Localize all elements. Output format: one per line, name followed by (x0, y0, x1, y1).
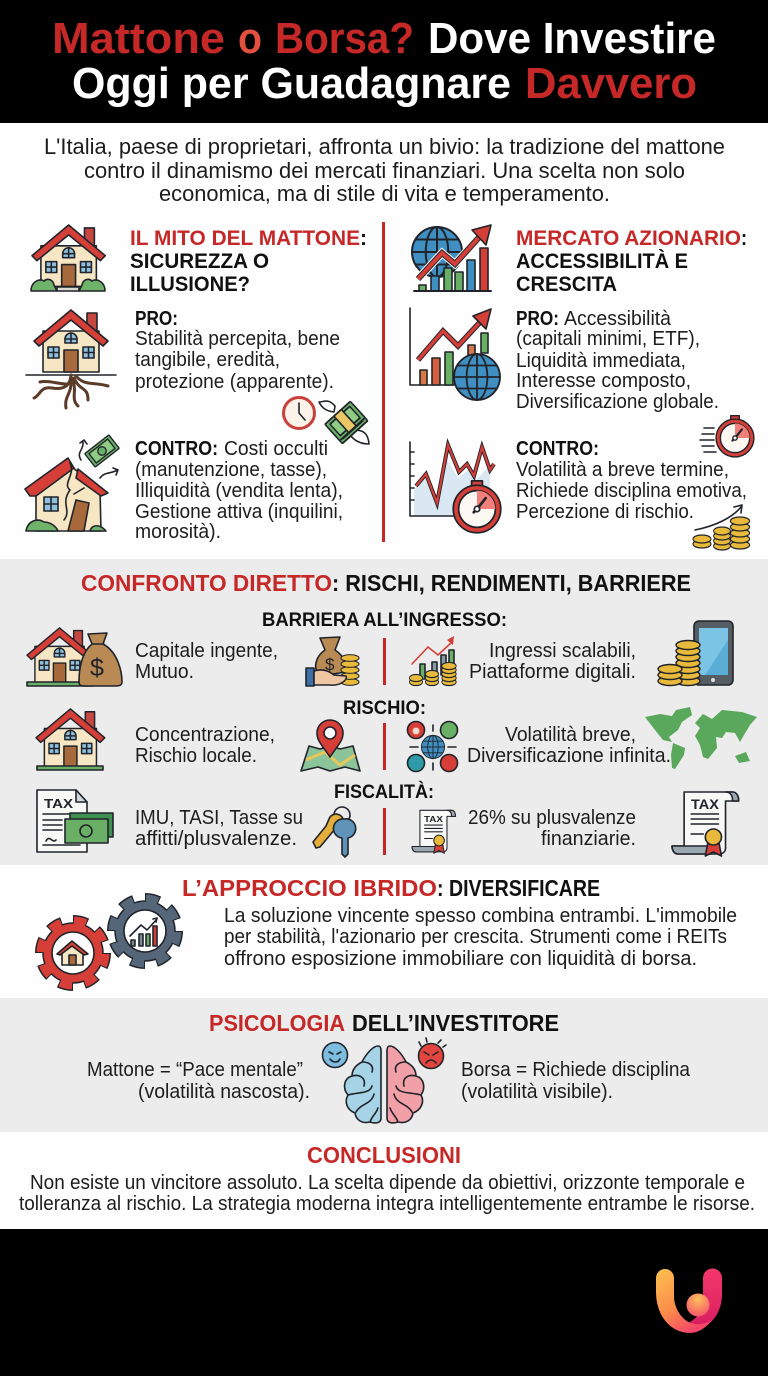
heading: confronto diretto: CONFRONTO DIRETTO (81, 570, 332, 596)
icon: large tax scroll (672, 792, 739, 856)
text: borsa disciplina: (volatilità visibile). (461, 1081, 613, 1103)
text: conclusioni (19, 1172, 755, 1215)
icon: chart and coins (409, 636, 456, 686)
panel: psicologia (0, 998, 768, 1132)
icon: tax document with money: TAX (44, 796, 73, 811)
heading: confronto diretto (81, 570, 691, 596)
text: contro borsa: Richiede disciplina emotiva, (516, 480, 747, 502)
text: imu tasi: IMU, TASI, Tasse su (135, 807, 303, 829)
heading: mercato azionario: ACCESSIBILITÀ E (516, 250, 688, 273)
text: approccio ibrido: offrono esposizione immobiliare con liquidità di borsa. (224, 948, 697, 970)
subheading: rischio: RISCHIO: (343, 698, 426, 719)
panel: conclusioni (0, 1132, 768, 1229)
text: pro borsa: (capitali minimi, ETF), (516, 328, 700, 350)
text: contro borsa: Percezione di rischio. (516, 501, 694, 523)
text: volatilita breve: Diversificazione infinita. (467, 745, 671, 767)
text: pro mattone: Stabilità percepita, bene (135, 328, 340, 350)
text: imu tasi (135, 807, 303, 850)
text: contro mattone: CONTRO: (135, 438, 218, 460)
text: volatilita breve (467, 724, 671, 767)
panel: header (0, 0, 768, 123)
text: ingressi scalabili: Ingressi scalabili, (489, 640, 636, 662)
title: Davvero (525, 59, 697, 108)
heading: psicologia: PSICOLOGIA (209, 1010, 345, 1036)
text: pro mattone: tangibile, eredità, (135, 349, 280, 371)
text: concentrazione: Concentrazione, (135, 724, 275, 746)
icon: stopwatch with speed lines (700, 416, 754, 457)
text: pro borsa: PRO: (516, 308, 559, 330)
heading: il mito del mattone: ILLUSIONE? (130, 273, 250, 296)
heading: mercato azionario (516, 227, 747, 296)
text: contro borsa: Volatilità a breve termine, (516, 459, 729, 481)
text: pro borsa: Interesse composto, (516, 370, 691, 392)
icon: tax document with money (37, 790, 113, 852)
row: barriera all'ingresso (27, 610, 733, 686)
text: contro mattone (135, 438, 343, 543)
icon: calm face (322, 1042, 348, 1068)
icon: phone and coins (658, 621, 733, 686)
heading: approccio ibrido (182, 875, 600, 901)
panel: footer (0, 1229, 768, 1376)
text: contro mattone: (manutenzione, tasse), (135, 459, 327, 481)
text: ingressi scalabili (469, 640, 636, 683)
heading: mercato azionario: : (741, 227, 747, 250)
intro text: L'Italia, paese di proprietari, affronta un bivio: la tradizione del mattone (44, 134, 725, 159)
text: approccio ibrido: La soluzione vincente spesso combina entrambi. L'immobile (224, 905, 737, 927)
text: pro borsa: Diversificazione globale. (516, 391, 719, 413)
text: contro mattone: Illiquidità (vendita lenta), (135, 480, 343, 502)
icon: small tax scroll (412, 810, 456, 853)
subheading: barriera: BARRIERA ALL’INGRESSO: (262, 610, 507, 631)
icon: global diversification network (408, 722, 458, 772)
icon: volatile chart with stopwatch (410, 442, 501, 533)
text: borsa disciplina: Borsa = Richiede disciplina (461, 1059, 691, 1081)
icon: globe with growth chart (412, 225, 491, 291)
heading: approccio ibrido: : DIVERSIFICARE (437, 875, 600, 901)
text: pro mattone (135, 308, 340, 393)
text: 26 percent (468, 807, 636, 850)
text: mattone pace mentale: (volatilità nascosta). (138, 1081, 310, 1103)
text: contro borsa (516, 438, 747, 523)
heading: confronto diretto: : RISCHI, RENDIMENTI, BARRIERE (332, 570, 691, 596)
heading: il mito del mattone: : (360, 227, 367, 250)
icon: house (31, 225, 105, 291)
text: capitale ingente: Capitale ingente, (135, 640, 278, 662)
title: Borsa? (275, 14, 414, 63)
icon: house and money bag (27, 628, 122, 686)
text: mattone pace mentale (87, 1059, 310, 1103)
heading: approccio ibrido: L’APPROCCIO IBRIDO (182, 875, 437, 901)
icon: house and money bag: $ (90, 654, 104, 682)
icon: chart with globe (410, 308, 500, 400)
row: rischio (36, 698, 757, 803)
text: pro borsa: Accessibilità (564, 308, 672, 330)
heading: conclusioni: CONCLUSIONI (307, 1142, 461, 1168)
icon: angry face (418, 1038, 446, 1068)
text: 26 percent: finanziarie. (541, 828, 636, 850)
row: fiscalita (37, 790, 739, 857)
intro text (44, 134, 725, 206)
text: approccio ibrido (224, 905, 737, 970)
heading: il mito del mattone: IL MITO DEL MATTONE (130, 227, 360, 250)
icon: two-hemisphere brain (345, 1046, 424, 1123)
icon: hand with bag and coins (306, 637, 359, 686)
title: Dove Investire (428, 14, 716, 63)
icon: house (36, 709, 105, 770)
text: ingressi scalabili: Piattaforme digitali. (469, 661, 636, 683)
heading: psicologia (209, 1010, 559, 1036)
icon: map with pin (301, 720, 360, 771)
panel: approccio ibrido (0, 865, 768, 998)
icon: keys (313, 807, 356, 857)
icon: small tax scroll: TAX (424, 814, 443, 824)
intro text: economica, ma di stile di vita e temperamento. (159, 181, 610, 206)
heading: il mito del mattone (130, 227, 367, 296)
text: volatilita breve: Volatilità breve, (505, 724, 636, 746)
subheading: fiscalita: FISCALITÀ: (334, 781, 434, 803)
title: Mattone (52, 14, 225, 63)
icon: clock (284, 398, 314, 428)
text: 26 percent: 26% su plusvalenze (468, 807, 636, 829)
text: contro borsa: CONTRO: (516, 438, 599, 460)
title (52, 14, 716, 108)
text: conclusioni: Non esiste un vincitore assoluto. La scelta dipende da obiettivi, orizzonte temporale e (30, 1172, 745, 1194)
text: pro borsa: Liquidità immediata, (516, 350, 686, 372)
panel: confronto diretto (0, 559, 768, 865)
heading: psicologia: DELL’INVESTITORE (352, 1010, 559, 1036)
icon: hand with bag and coins: $ (325, 655, 335, 674)
text: mattone pace mentale: Mattone = “Pace mentale” (87, 1059, 303, 1081)
icon: world map (645, 707, 757, 769)
text: contro mattone: morosità). (135, 521, 221, 543)
panel: comparison of the two assets (0, 123, 768, 559)
icon: cracked house with money (25, 435, 119, 531)
text: pro borsa (516, 308, 719, 413)
heading: il mito del mattone: SICUREZZA O (130, 250, 269, 273)
text: capitale ingente (135, 640, 278, 683)
text: concentrazione (135, 724, 275, 767)
text: borsa disciplina (461, 1059, 691, 1103)
heading: mercato azionario: CRESCITA (516, 273, 617, 296)
title: Oggi per Guadagnare (72, 59, 511, 108)
icon: house with roots (26, 310, 116, 408)
text: contro mattone: Costi occulti (224, 438, 328, 460)
text: capitale ingente: Mutuo. (135, 661, 194, 683)
icon: slate gear with chart (112, 898, 178, 964)
heading: mercato azionario: MERCATO AZIONARIO (516, 227, 741, 250)
text: concentrazione: Rischio locale. (135, 745, 257, 767)
icon: large tax scroll: TAX (691, 796, 720, 812)
icon: logo (656, 1268, 722, 1333)
title: o (238, 14, 262, 63)
text: approccio ibrido: per stabilità, l'azionario per crescita. Strumenti come i REITs (224, 926, 727, 948)
icon: red gear with house (40, 920, 106, 986)
icon: growing coins (693, 505, 750, 550)
text: imu tasi: affitti/plusvalenze. (135, 828, 297, 850)
text: pro mattone: PRO: (135, 308, 178, 330)
text: pro mattone: protezione (apparente). (135, 371, 334, 393)
intro text: contro il dinamismo dei mercati finanziari. Una scelta non solo (84, 158, 685, 183)
text: contro mattone: Gestione attiva (inquilini, (135, 501, 343, 523)
icon: flying money (319, 401, 369, 444)
